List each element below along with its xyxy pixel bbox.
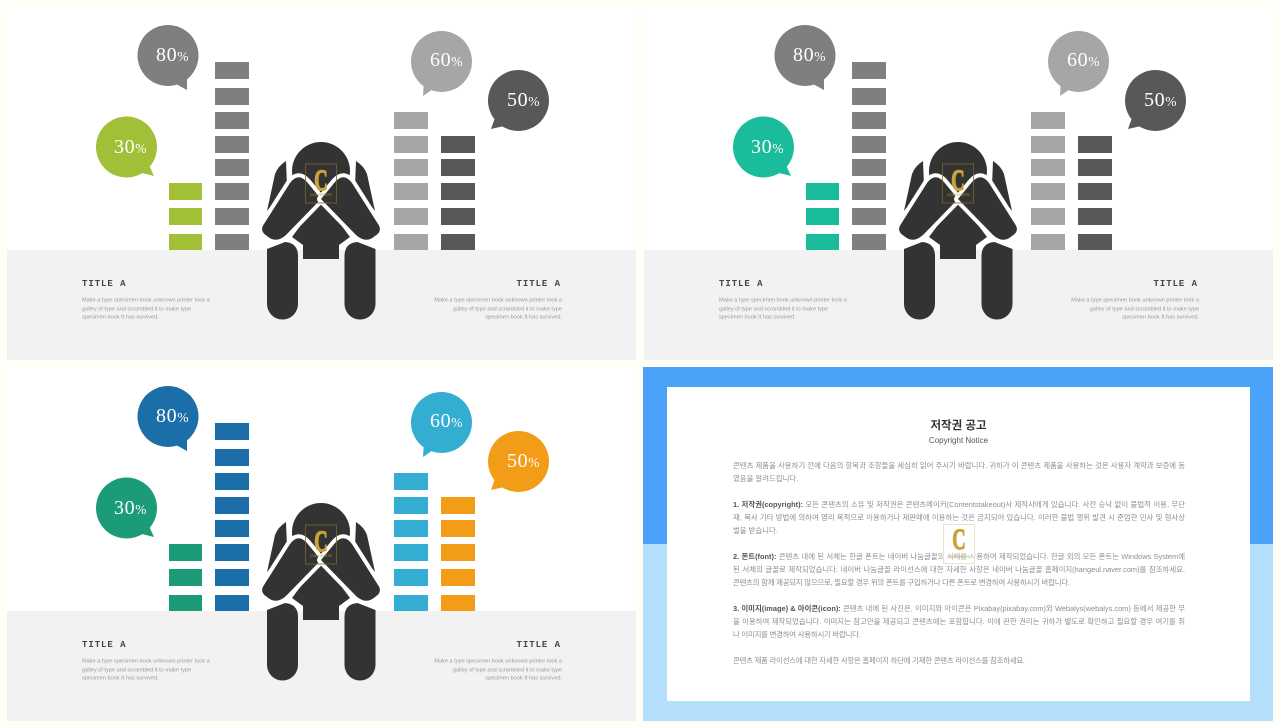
- speech bubble: 50%: 50%: [1144, 89, 1177, 111]
- text block: left title: TITLE A: [719, 279, 763, 289]
- heading: notice title: 저작권 공고: [930, 420, 987, 432]
- bar column: 30% green: [169, 183, 202, 250]
- panel: copyright notice: [643, 367, 1273, 721]
- text block: left title: specimen book It has survived.: [82, 314, 159, 320]
- speech bubble: 30%: [96, 116, 157, 178]
- bar column: 80% grey: [852, 62, 886, 250]
- icon: gold logo watermark: [943, 524, 975, 564]
- speech bubble: 50%: [1125, 70, 1186, 131]
- speech bubble: 50%: [488, 431, 549, 492]
- speech bubble: 60%: 60%: [430, 410, 463, 432]
- text block: left title: specimen book It has survived.: [719, 314, 796, 320]
- speech bubble: 80%: 80%: [156, 44, 189, 66]
- text block: left title: galley of type and scrambled it to make type: [82, 306, 191, 312]
- icon: head-in-hands figure: [262, 142, 380, 320]
- bar column: 30% green: [169, 544, 202, 611]
- speech bubble: 60%: 60%: [1067, 49, 1100, 71]
- speech bubble: 80%: [138, 386, 198, 451]
- text block: left title: [82, 640, 211, 682]
- speech bubble: 60%: [411, 392, 472, 457]
- icon: head-in-hands figure: [262, 503, 380, 680]
- text block: left title: [719, 279, 848, 320]
- icon: gold logo watermark: C: [952, 523, 966, 556]
- text block: left title: Make a type specimen book unknown printer took a: [82, 298, 211, 304]
- speech bubble: 60%: [1048, 31, 1109, 96]
- panel: bottom left, multicolour: [7, 368, 636, 721]
- bar column: 80% blue: [215, 423, 249, 611]
- bar column: 50% dark grey: [1078, 136, 1112, 250]
- text block: left title: TITLE A: [82, 279, 126, 289]
- bar column: 30% teal: [806, 183, 839, 250]
- text block: right title: specimen book It has survived.: [1122, 314, 1199, 320]
- text block: notice body: [733, 460, 1185, 664]
- text block: right title: galley of type and scrambled it to make type: [453, 306, 562, 312]
- speech bubble: 80%: [138, 25, 198, 90]
- speech bubble: 30%: [733, 116, 794, 178]
- speech bubble: 50%: [488, 70, 549, 131]
- icon: gold logo watermark: CONTENTS: [948, 554, 970, 559]
- speech bubble: 30%: 30%: [114, 136, 147, 158]
- text block: left title: specimen book It has survived.: [82, 676, 159, 682]
- bar column: 50% dark grey: [441, 136, 475, 250]
- text block: right title: TITLE A: [517, 279, 561, 289]
- bar column: 50% orange: [441, 497, 475, 611]
- speech bubble: 80%: 80%: [156, 405, 189, 427]
- text block: right title: specimen book It has survived.: [485, 314, 562, 320]
- text block: notice body: 콘텐츠의 함께 제공되지 않으므로, 필요할 경우 위의 폰트를 구입하거나 다른 폰트로 변경하여 사용하시기 바랍니다.: [733, 578, 1070, 586]
- speech bubble: 30%: [96, 478, 157, 538]
- bar column: 60% light grey: [1031, 112, 1065, 250]
- speech bubble: 30%: 30%: [114, 497, 147, 519]
- text block: left title: [82, 279, 211, 320]
- text block: left title: Make a type specimen book unknown printer took a: [82, 658, 211, 664]
- bar column: 80% grey: [215, 62, 249, 250]
- text block: notice body: 나 이미지를 변경하여 사용하시기 바랍니다.: [733, 630, 861, 638]
- text block: left title: galley of type and scrambled it to make type: [82, 668, 191, 674]
- text block: right title: Make a type specimen book unknown printer took a: [434, 658, 563, 664]
- text block: right title: Make a type specimen book unknown printer took a: [1071, 298, 1200, 304]
- speech bubble: 50%: 50%: [507, 89, 540, 111]
- text block: notice body: 벌을 받습니다.: [733, 526, 778, 534]
- speech bubble: 60%: [411, 31, 472, 96]
- heading: notice subtitle: Copyright Notice: [929, 436, 988, 445]
- text block: notice body: 콘텐츠 제품 라이선스에 대한 자세한 사항은 홈페이지 하단에 기재한 콘텐츠 라이선스를 참조하세요.: [733, 656, 1025, 664]
- text block: right title: [1071, 279, 1200, 320]
- speech bubble: 30%: 30%: [751, 136, 784, 158]
- text block: right title: galley of type and scrambled it to make type: [1090, 306, 1199, 312]
- text block: right title: [434, 279, 563, 320]
- speech bubble: 50%: 50%: [507, 450, 540, 472]
- panel: top left, green accent: [7, 7, 636, 360]
- text block: right title: TITLE A: [1154, 279, 1198, 289]
- panel: top right, teal accent: [644, 7, 1273, 360]
- text block: right title: galley of type and scrambled it to make type: [453, 668, 562, 674]
- text block: right title: TITLE A: [517, 640, 561, 650]
- text block: right title: Make a type specimen book unknown printer took a: [434, 298, 563, 304]
- bar column: 60% light grey: [394, 112, 428, 250]
- text block: right title: specimen book It has survived.: [485, 676, 562, 682]
- text block: left title: Make a type specimen book unknown printer took a: [719, 298, 848, 304]
- speech bubble: 80%: 80%: [793, 44, 826, 66]
- text block: right title: [434, 640, 563, 682]
- bar column: 60% light blue: [394, 473, 428, 611]
- text block: notice body: 였음을 알려드립니다.: [733, 474, 798, 482]
- icon: head-in-hands figure: [899, 142, 1017, 320]
- speech bubble: 60%: 60%: [430, 49, 463, 71]
- text block: left title: TITLE A: [82, 640, 126, 650]
- speech bubble: 80%: [774, 25, 836, 90]
- text block: left title: galley of type and scrambled it to make type: [719, 306, 828, 312]
